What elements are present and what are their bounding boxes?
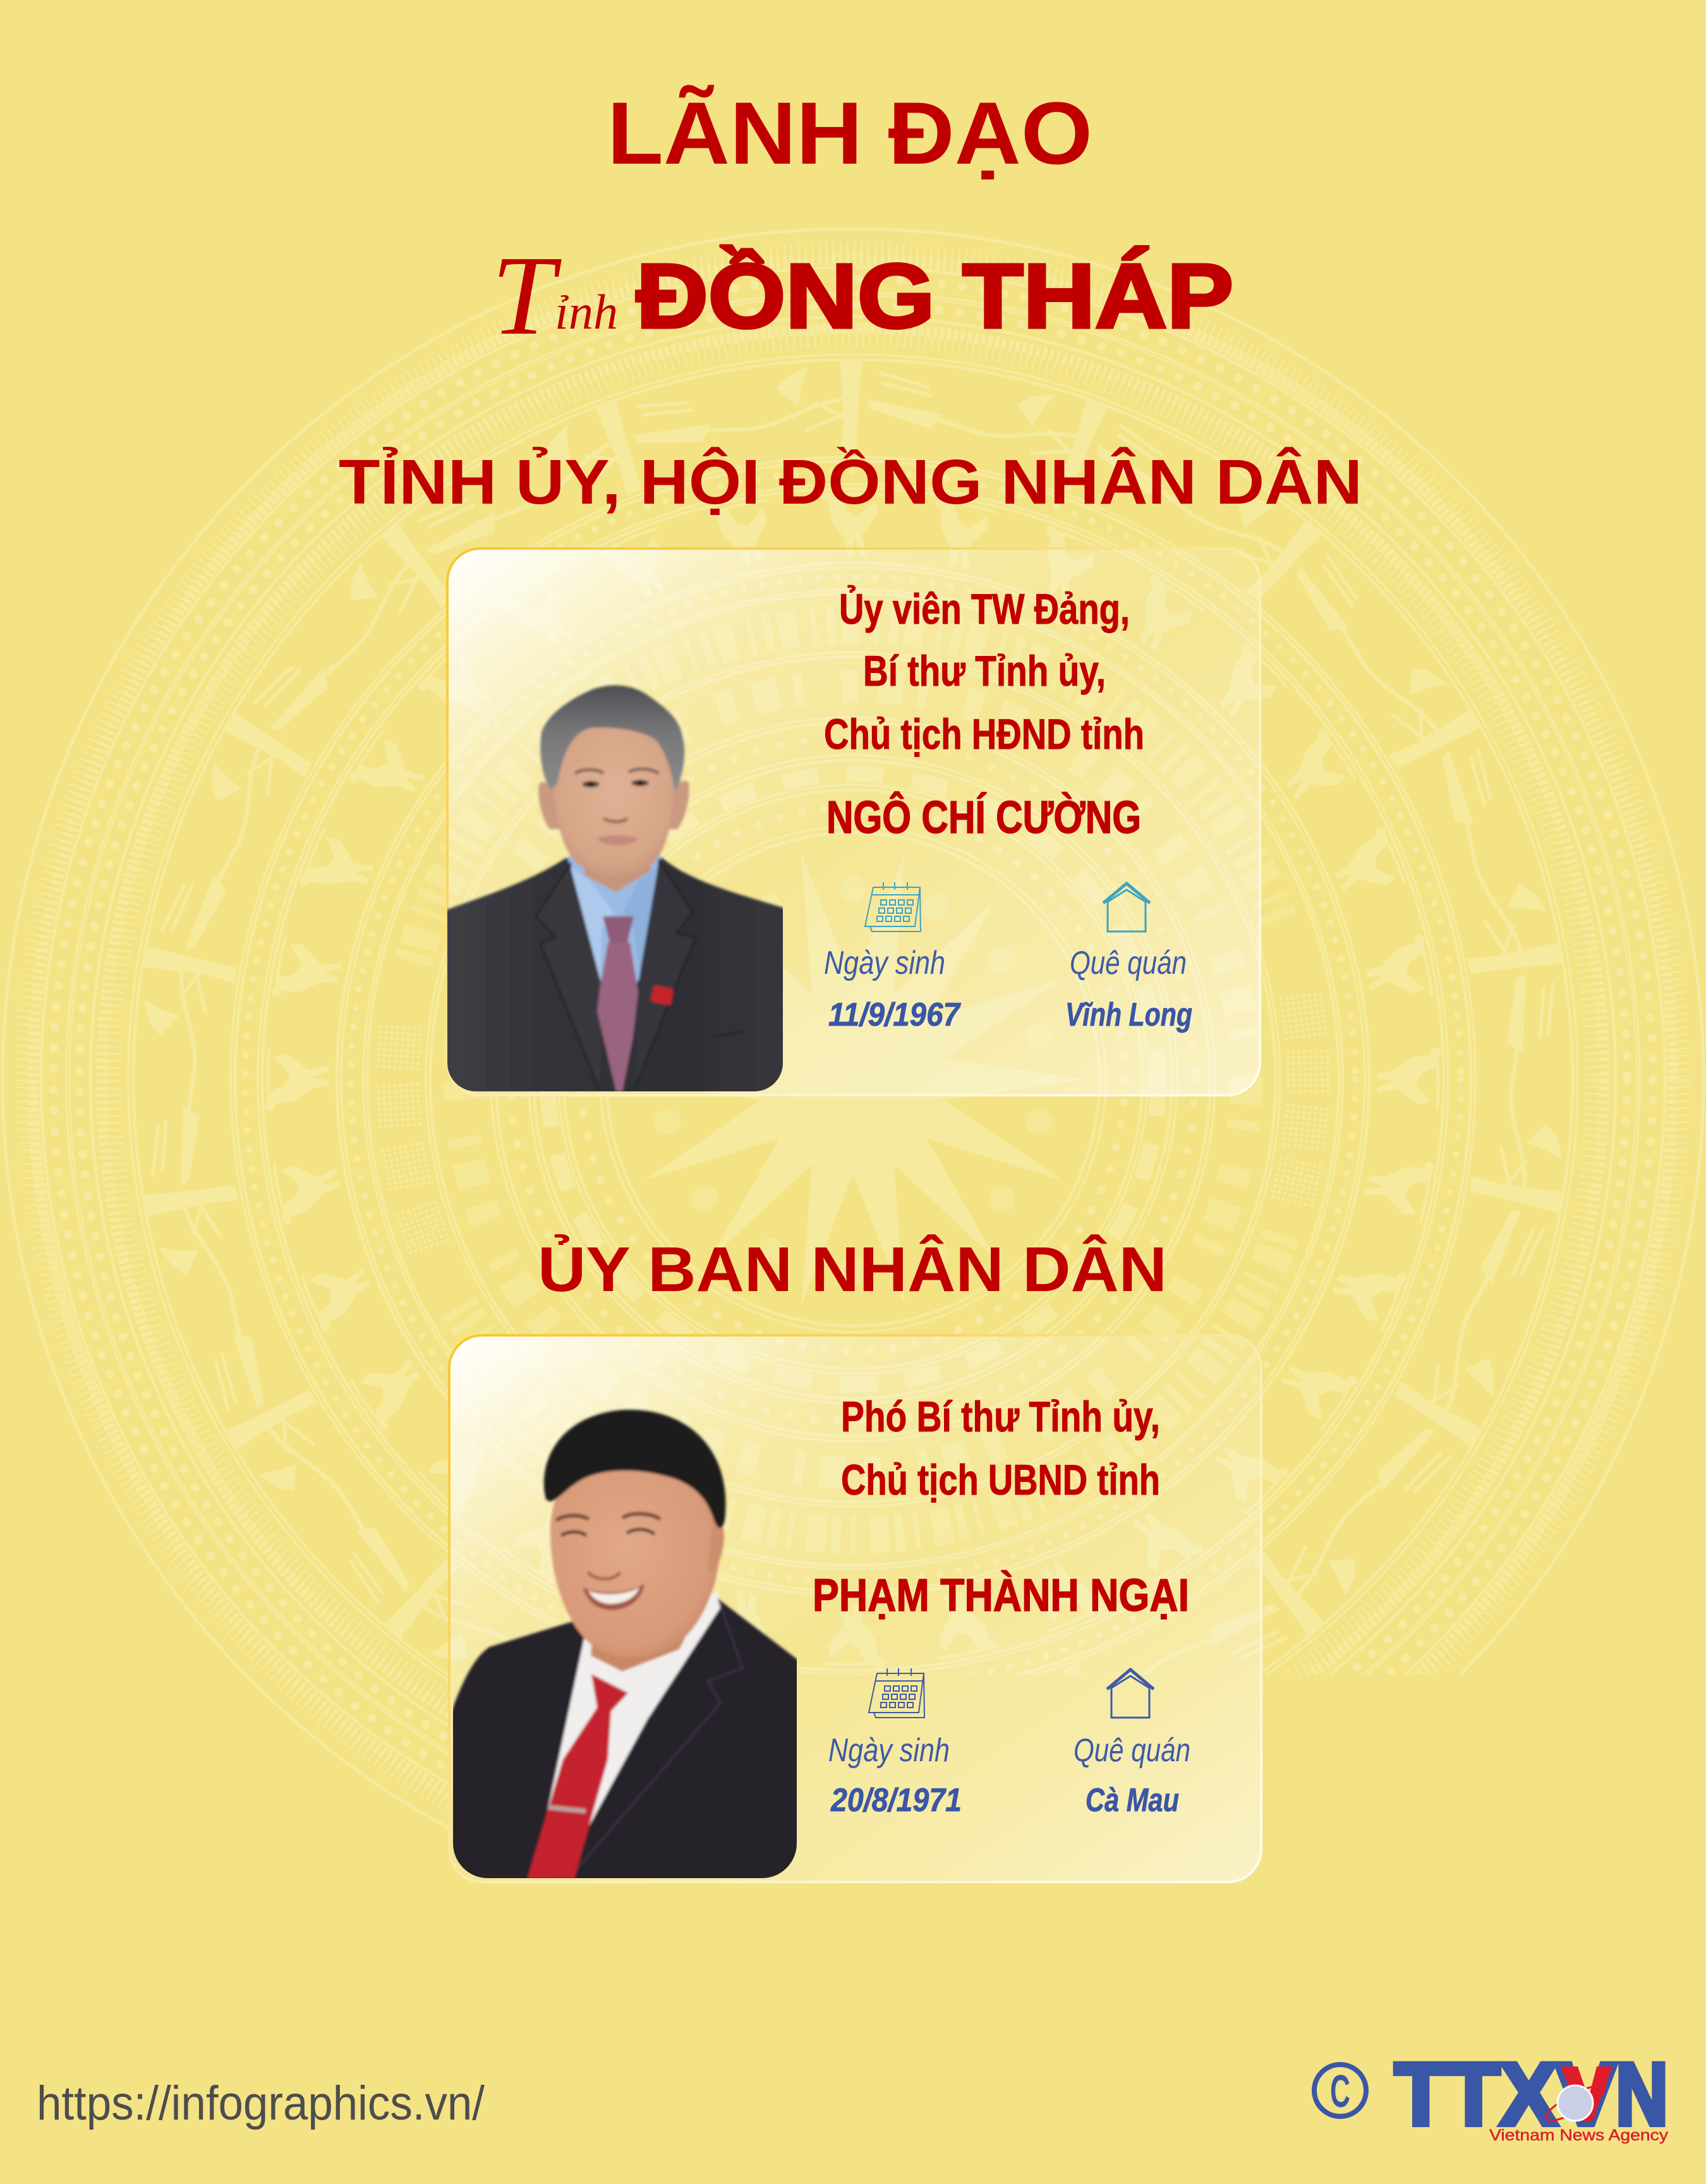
footer url: https://infographics.vn/: [37, 2077, 485, 2130]
icon: house: [1107, 1670, 1154, 1718]
icon: copyright: C: [1330, 2066, 1350, 2117]
title: Tỉnh (script): T: [492, 233, 562, 358]
role: Chủ tịch UBND tỉnh: Chủ tịch UBND tỉnh: [841, 1456, 1160, 1504]
value: hometown: Cà Mau: [1086, 1782, 1179, 1819]
value: birth date: 20/8/1971: [830, 1782, 962, 1819]
logo tagline: Vietnam News Agency: [1489, 2126, 1669, 2144]
name: Phạm Thành Ngại: PHẠM THÀNH NGẠI: [813, 1570, 1189, 1621]
portrait: Phạm Thành Ngại: [449, 1410, 802, 1886]
name: Ngô Chí Cường: NGÔ CHÍ CƯỜNG: [826, 792, 1141, 843]
label: Ngày sinh: Ngày sinh: [824, 945, 945, 981]
heading: Ủy ban nhân dân: ỦY BAN NHÂN DÂN: [538, 1234, 1167, 1305]
label: Quê quán: Quê quán: [1070, 945, 1187, 981]
role: Phó Bí thư Tỉnh ủy: Phó Bí thư Tỉnh ủy,: [841, 1393, 1160, 1441]
value: birth date: 11/9/1967: [828, 997, 961, 1033]
logo: TTXVN: V: [1556, 2044, 1616, 2144]
label: Ngày sinh: Ngày sinh: [828, 1732, 950, 1769]
logo: TTXVN: [1394, 2044, 1669, 2144]
logo: TTXVN: TTX: [1394, 2044, 1558, 2144]
background pattern: bronze drum: [3, 229, 1703, 1930]
heading: Tỉnh ủy, Hội đồng nhân dân: TỈNH ỦY, HỘI ĐỒNG NHÂN DÂN: [339, 446, 1362, 518]
icon: house: [1103, 883, 1150, 931]
logo: TTXVN: N: [1616, 2044, 1668, 2144]
role: Chủ tịch HĐND tỉnh: Chủ tịch HĐND tỉnh: [824, 710, 1144, 758]
icon: copyright: [1314, 2065, 1366, 2117]
title: ĐỒNG THÁP: ĐỒNG THÁP: [636, 245, 1233, 347]
role: Bí thư Tỉnh ủy: Bí thư Tỉnh ủy,: [863, 647, 1106, 695]
title: LÃNH ĐẠO: LÃNH ĐẠO: [607, 83, 1092, 183]
panel: card Ngô Chí Cường: [442, 549, 1260, 1096]
value: hometown: Vĩnh Long: [1065, 997, 1192, 1033]
label: Quê quán: Quê quán: [1074, 1732, 1190, 1769]
portrait: Ngô Chí Cường: [442, 685, 787, 1096]
icon: calendar: [869, 1668, 924, 1718]
role: Ủy viên TW Đảng: Ủy viên TW Đảng,: [839, 585, 1130, 633]
panel: card Phạm Thành Ngại: [449, 1335, 1261, 1886]
title: Tỉnh (script): ỉnh: [555, 284, 618, 339]
icon: calendar: [865, 882, 921, 931]
